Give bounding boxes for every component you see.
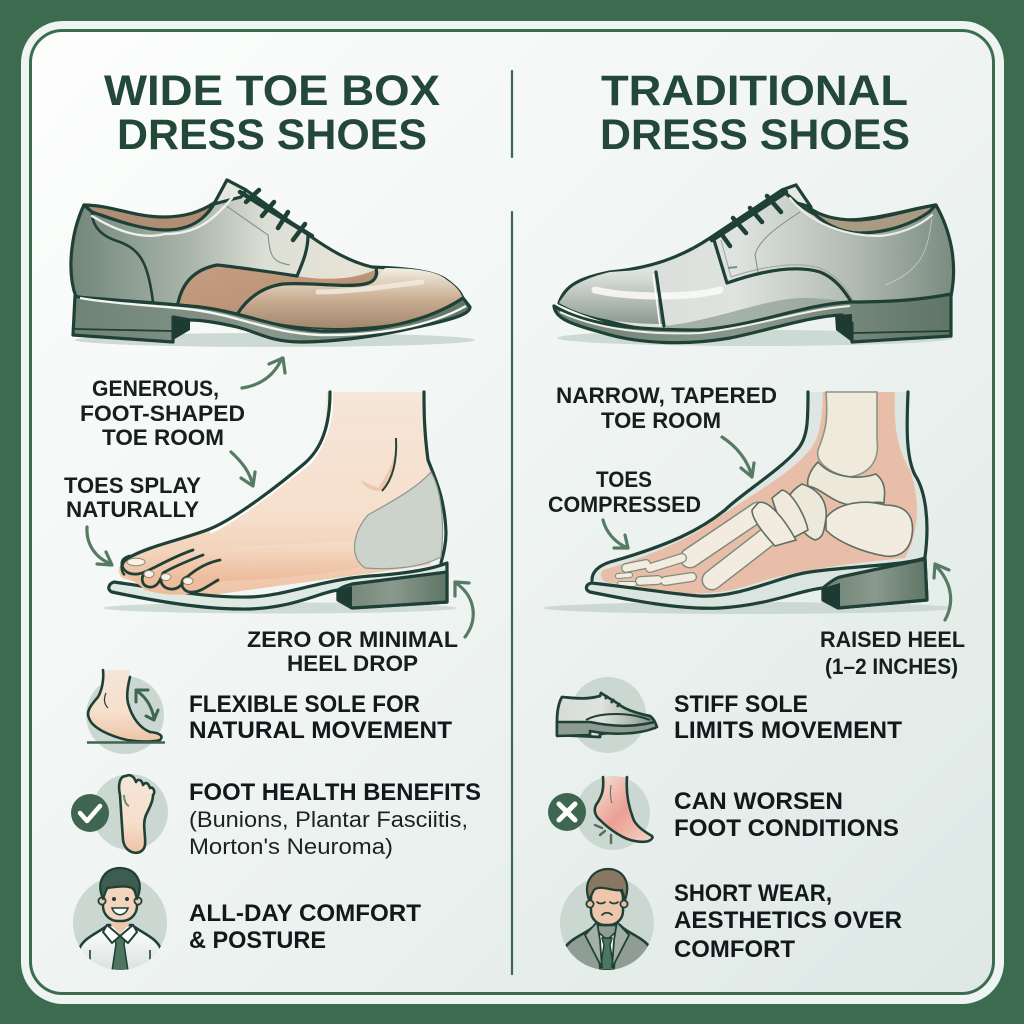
- heading: wide toe box dress shoes: DRESS SHOES: [117, 111, 427, 159]
- callout: narrow tapered toe room: [556, 383, 777, 433]
- icon: smiling man: [73, 868, 167, 975]
- text: can worsen foot conditions: CAN WORSEN: [674, 788, 843, 815]
- callout: toes compressed: COMPRESSED: [548, 492, 701, 517]
- text: stiff sole: LIMITS MOVEMENT: [674, 717, 902, 744]
- text: foot health benefits: [189, 779, 481, 859]
- callout: generous foot-shaped toe room: FOOT-SHAPED: [80, 401, 245, 426]
- callout: narrow tapered toe room: TOE ROOM: [601, 408, 721, 433]
- callout: generous foot-shaped toe room: [80, 376, 245, 450]
- arrow: to toes: [87, 527, 112, 565]
- callout: raised heel: RAISED HEEL: [820, 627, 965, 652]
- illustration: bare foot on flat sole: [103, 392, 457, 614]
- callout: toes compressed: TOES: [596, 467, 652, 492]
- text: can worsen foot conditions: FOOT CONDITIONS: [674, 815, 899, 842]
- illustration: wide toe box shoe: [71, 180, 475, 347]
- heading: wide toe box dress shoes: [104, 67, 440, 159]
- arrow: up to shoe: [242, 358, 285, 388]
- callout: zero or minimal heel drop: HEEL DROP: [287, 651, 418, 676]
- text: can worsen foot conditions: [674, 788, 899, 842]
- text: flexible sole: NATURAL MOVEMENT: [189, 717, 452, 744]
- text: stiff sole: [674, 691, 902, 744]
- callout: toes compressed: [548, 467, 701, 517]
- text: short wear: COMFORT: [674, 936, 795, 963]
- callout: raised heel: (1–2 INCHES): [825, 654, 958, 679]
- illustration: traditional dress shoe: [554, 185, 954, 346]
- callout: narrow tapered toe room: NARROW, TAPERED: [556, 383, 777, 408]
- text: short wear: SHORT WEAR,: [674, 880, 832, 907]
- arrow: to raised heel: [934, 564, 951, 620]
- text: short wear: AESTHETICS OVER: [674, 907, 902, 934]
- heading: traditional dress shoes: TRADITIONAL: [601, 67, 908, 115]
- heading: wide toe box dress shoes: WIDE TOE BOX: [104, 67, 440, 115]
- callout: generous foot-shaped toe room: TOE ROOM: [102, 425, 224, 450]
- icon: stiff shoe: [557, 677, 657, 753]
- text: flexible sole: [189, 691, 452, 744]
- callout: raised heel: [820, 627, 965, 679]
- heading: traditional dress shoes: DRESS SHOES: [600, 111, 910, 159]
- arrow: to flat heel: [455, 582, 473, 637]
- callout: toes splay naturally: [64, 473, 201, 522]
- text: foot health benefits: Morton's Neuroma): [189, 834, 393, 859]
- text: foot health benefits: (Bunions, Plantar Fasciitis,: [189, 807, 468, 832]
- heading: traditional dress shoes: [600, 67, 910, 159]
- callout: toes splay naturally: TOES SPLAY: [64, 473, 201, 498]
- text: all-day comfort: & POSTURE: [189, 927, 326, 954]
- arrow: down to foot top: [231, 452, 255, 486]
- centre divider line: [511, 71, 513, 974]
- text: short wear: [674, 880, 902, 963]
- icon: tired man in suit: [560, 869, 654, 975]
- callout: zero or minimal heel drop: ZERO OR MINIMAL: [247, 627, 458, 652]
- text: stiff sole: STIFF SOLE: [674, 691, 808, 718]
- text: flexible sole: FLEXIBLE SOLE FOR: [189, 691, 420, 718]
- callout: toes splay naturally: NATURALLY: [66, 497, 199, 522]
- arrow: to compressed toes: [603, 520, 628, 548]
- callout: generous foot-shaped toe room: GENEROUS,: [92, 376, 219, 401]
- text: all-day comfort: [189, 900, 421, 954]
- text: all-day comfort: ALL-DAY COMFORT: [189, 900, 421, 927]
- text: foot health benefits: FOOT HEALTH BENEFITS: [189, 779, 481, 806]
- arrow: to narrow toe box: [722, 437, 754, 477]
- callout: zero or minimal heel drop: [247, 627, 458, 676]
- icon: painful foot with cross: [548, 776, 652, 850]
- illustration: foot skeleton in narrow shoe: [543, 392, 953, 614]
- icon: flexible foot: [86, 670, 165, 754]
- icon: healthy foot sole with check: [71, 774, 168, 853]
